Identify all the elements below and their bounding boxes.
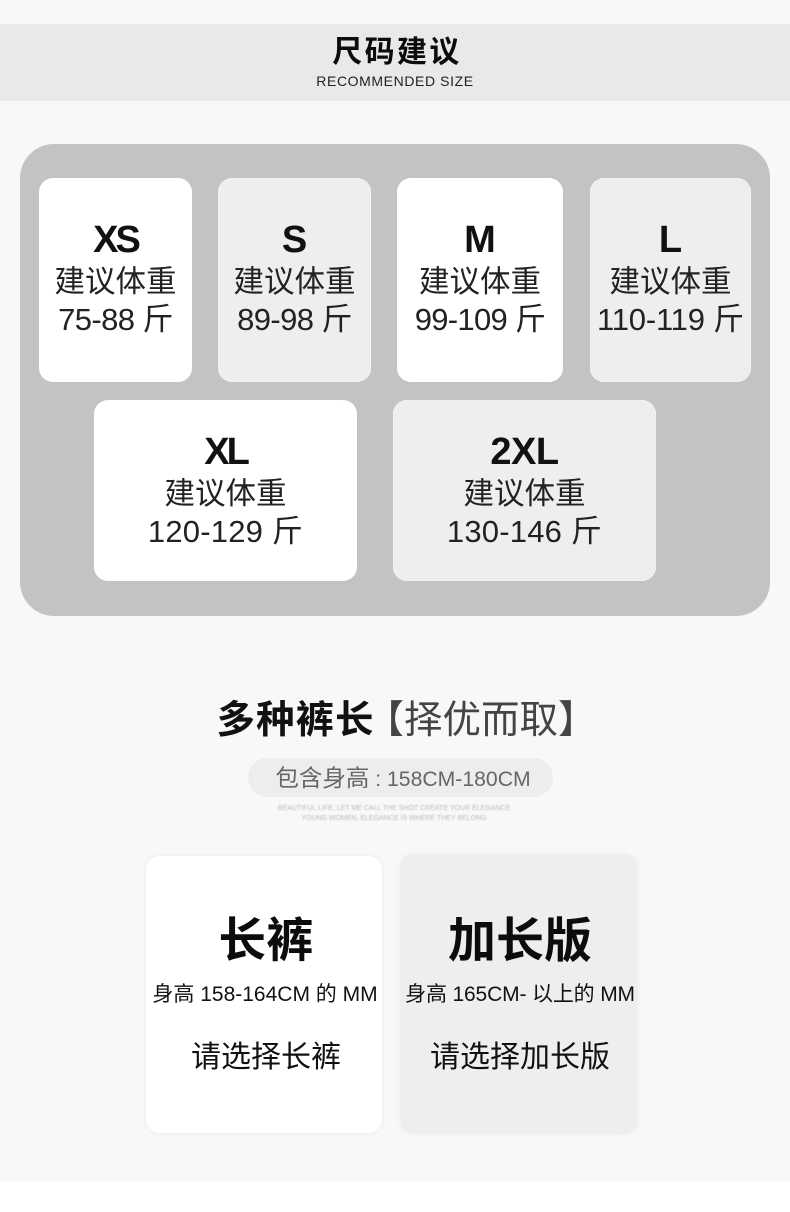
card title: 加长版 bbox=[448, 915, 592, 968]
card: 2XL: 2XL bbox=[490, 431, 559, 473]
card: 2XL: 建议体重 bbox=[464, 477, 586, 511]
card: M: M bbox=[464, 219, 496, 261]
card: M: 99-109 斤 bbox=[415, 302, 545, 337]
small tagline: BEAUTIFUL LIFE, LET ME CALL THE SHOT CREATE YOUR ELEGANCE bbox=[278, 805, 510, 812]
header band bbox=[0, 24, 790, 101]
small tagline: YOUNG WOMEN, ELEGANCE IS WHERE THEY BELONG bbox=[301, 814, 487, 822]
card: XL: 120-129 斤 bbox=[148, 514, 303, 549]
card: XS: 建议体重 bbox=[54, 265, 176, 299]
card: S: 建议体重 bbox=[234, 265, 356, 299]
card: S bbox=[218, 178, 371, 382]
heading: trouser lengths: 多种裤长【择优而取】 bbox=[216, 699, 597, 742]
card: XS: XS bbox=[93, 219, 138, 261]
small tagline bbox=[278, 804, 510, 822]
subtitle: RECOMMENDED SIZE bbox=[316, 73, 474, 89]
title: 尺码建议 bbox=[332, 36, 462, 69]
card: M: 建议体重 bbox=[419, 265, 541, 299]
card: M bbox=[397, 178, 563, 382]
card: L: 建议体重 bbox=[610, 265, 732, 299]
height range text: 包含身高 : 158CM-180CM bbox=[275, 765, 531, 791]
card: XL: 建议体重 bbox=[164, 477, 286, 511]
selection note: 请选择长裤 bbox=[191, 1041, 341, 1074]
card: L: 110-119 斤 bbox=[597, 302, 744, 337]
card title: 长裤 bbox=[218, 915, 314, 968]
height note: 身高 158-164CM 的 MM bbox=[152, 983, 378, 1006]
card: XS: 75-88 斤 bbox=[58, 302, 173, 337]
panel: size recommendations bbox=[20, 144, 770, 616]
height note: 身高 165CM- 以上的 MM bbox=[405, 983, 635, 1006]
card: L bbox=[590, 178, 751, 382]
selection note: 请选择加长版 bbox=[430, 1041, 610, 1074]
card: regular length bbox=[146, 856, 382, 1133]
card: 2XL bbox=[393, 400, 656, 581]
card: XS bbox=[39, 178, 192, 382]
height range pill bbox=[248, 758, 553, 797]
card: extended length bbox=[400, 854, 638, 1134]
card: L: L bbox=[659, 219, 682, 261]
card: 2XL: 130-146 斤 bbox=[447, 514, 602, 549]
card: XL: XL bbox=[204, 431, 247, 473]
card: XL bbox=[94, 400, 357, 581]
card: S: S bbox=[282, 219, 307, 261]
card: S: 89-98 斤 bbox=[237, 302, 352, 337]
